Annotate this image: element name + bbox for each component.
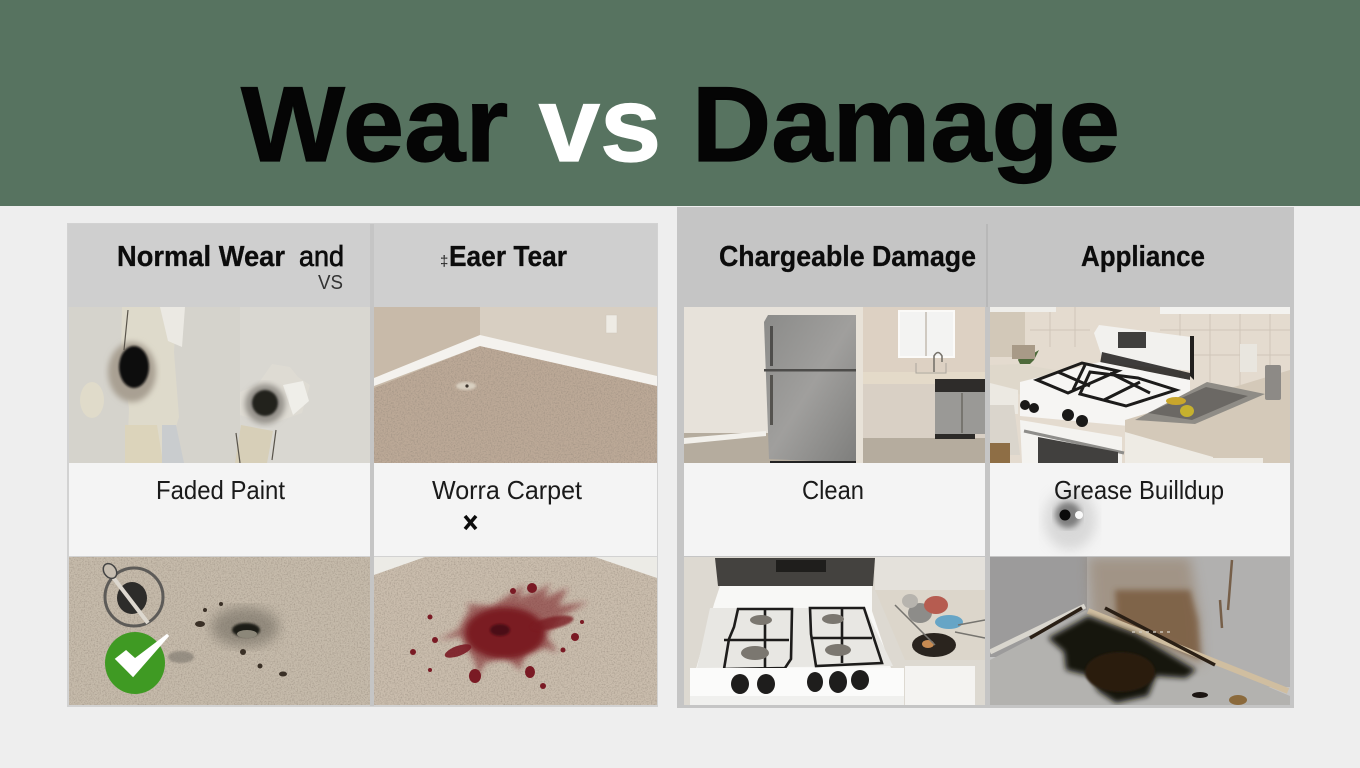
title: Wear vs Damage [241, 64, 1120, 184]
icon: green check [105, 632, 168, 694]
heading: eaer tear: Eaer Tear [449, 241, 567, 273]
heading: normal wear and: and [299, 241, 344, 273]
panel: chargeable damage [677, 207, 1294, 708]
heading: eaer tear: ‡ [440, 253, 448, 270]
heading: normal wear and [117, 241, 344, 294]
caption: faded paint: Faded Paint [156, 475, 286, 505]
photo: burned carpet [69, 557, 370, 705]
heading: normal wear and: Normal Wear [117, 241, 285, 273]
title banner [0, 0, 1360, 206]
panel: normal wear and tear [67, 223, 658, 707]
caption: grease buildup: Grease Builldup [1054, 475, 1224, 505]
heading: normal wear and: VS [318, 272, 343, 294]
caption: worn carpet: Worra Carpet [432, 475, 583, 505]
photo: white gas stove [990, 307, 1290, 463]
icon: x mark [465, 516, 476, 529]
caption: clean: Clean [802, 475, 864, 505]
photo: clean kitchen with fridge [684, 307, 985, 463]
smudge on caption [1044, 490, 1096, 550]
heading: appliance: Appliance [1081, 241, 1205, 273]
photo: red carpet stain [374, 557, 657, 705]
heading: chargeable damage: Chargeable Damage [719, 241, 976, 273]
icon: cotton swab on stain [100, 561, 163, 626]
photo: carpet room corner [374, 307, 657, 463]
photo: dirty-top white stove [684, 557, 985, 705]
photo: damaged wall [80, 307, 310, 463]
column divider [370, 224, 374, 706]
photo: burnt wall corner with grease [990, 557, 1290, 705]
